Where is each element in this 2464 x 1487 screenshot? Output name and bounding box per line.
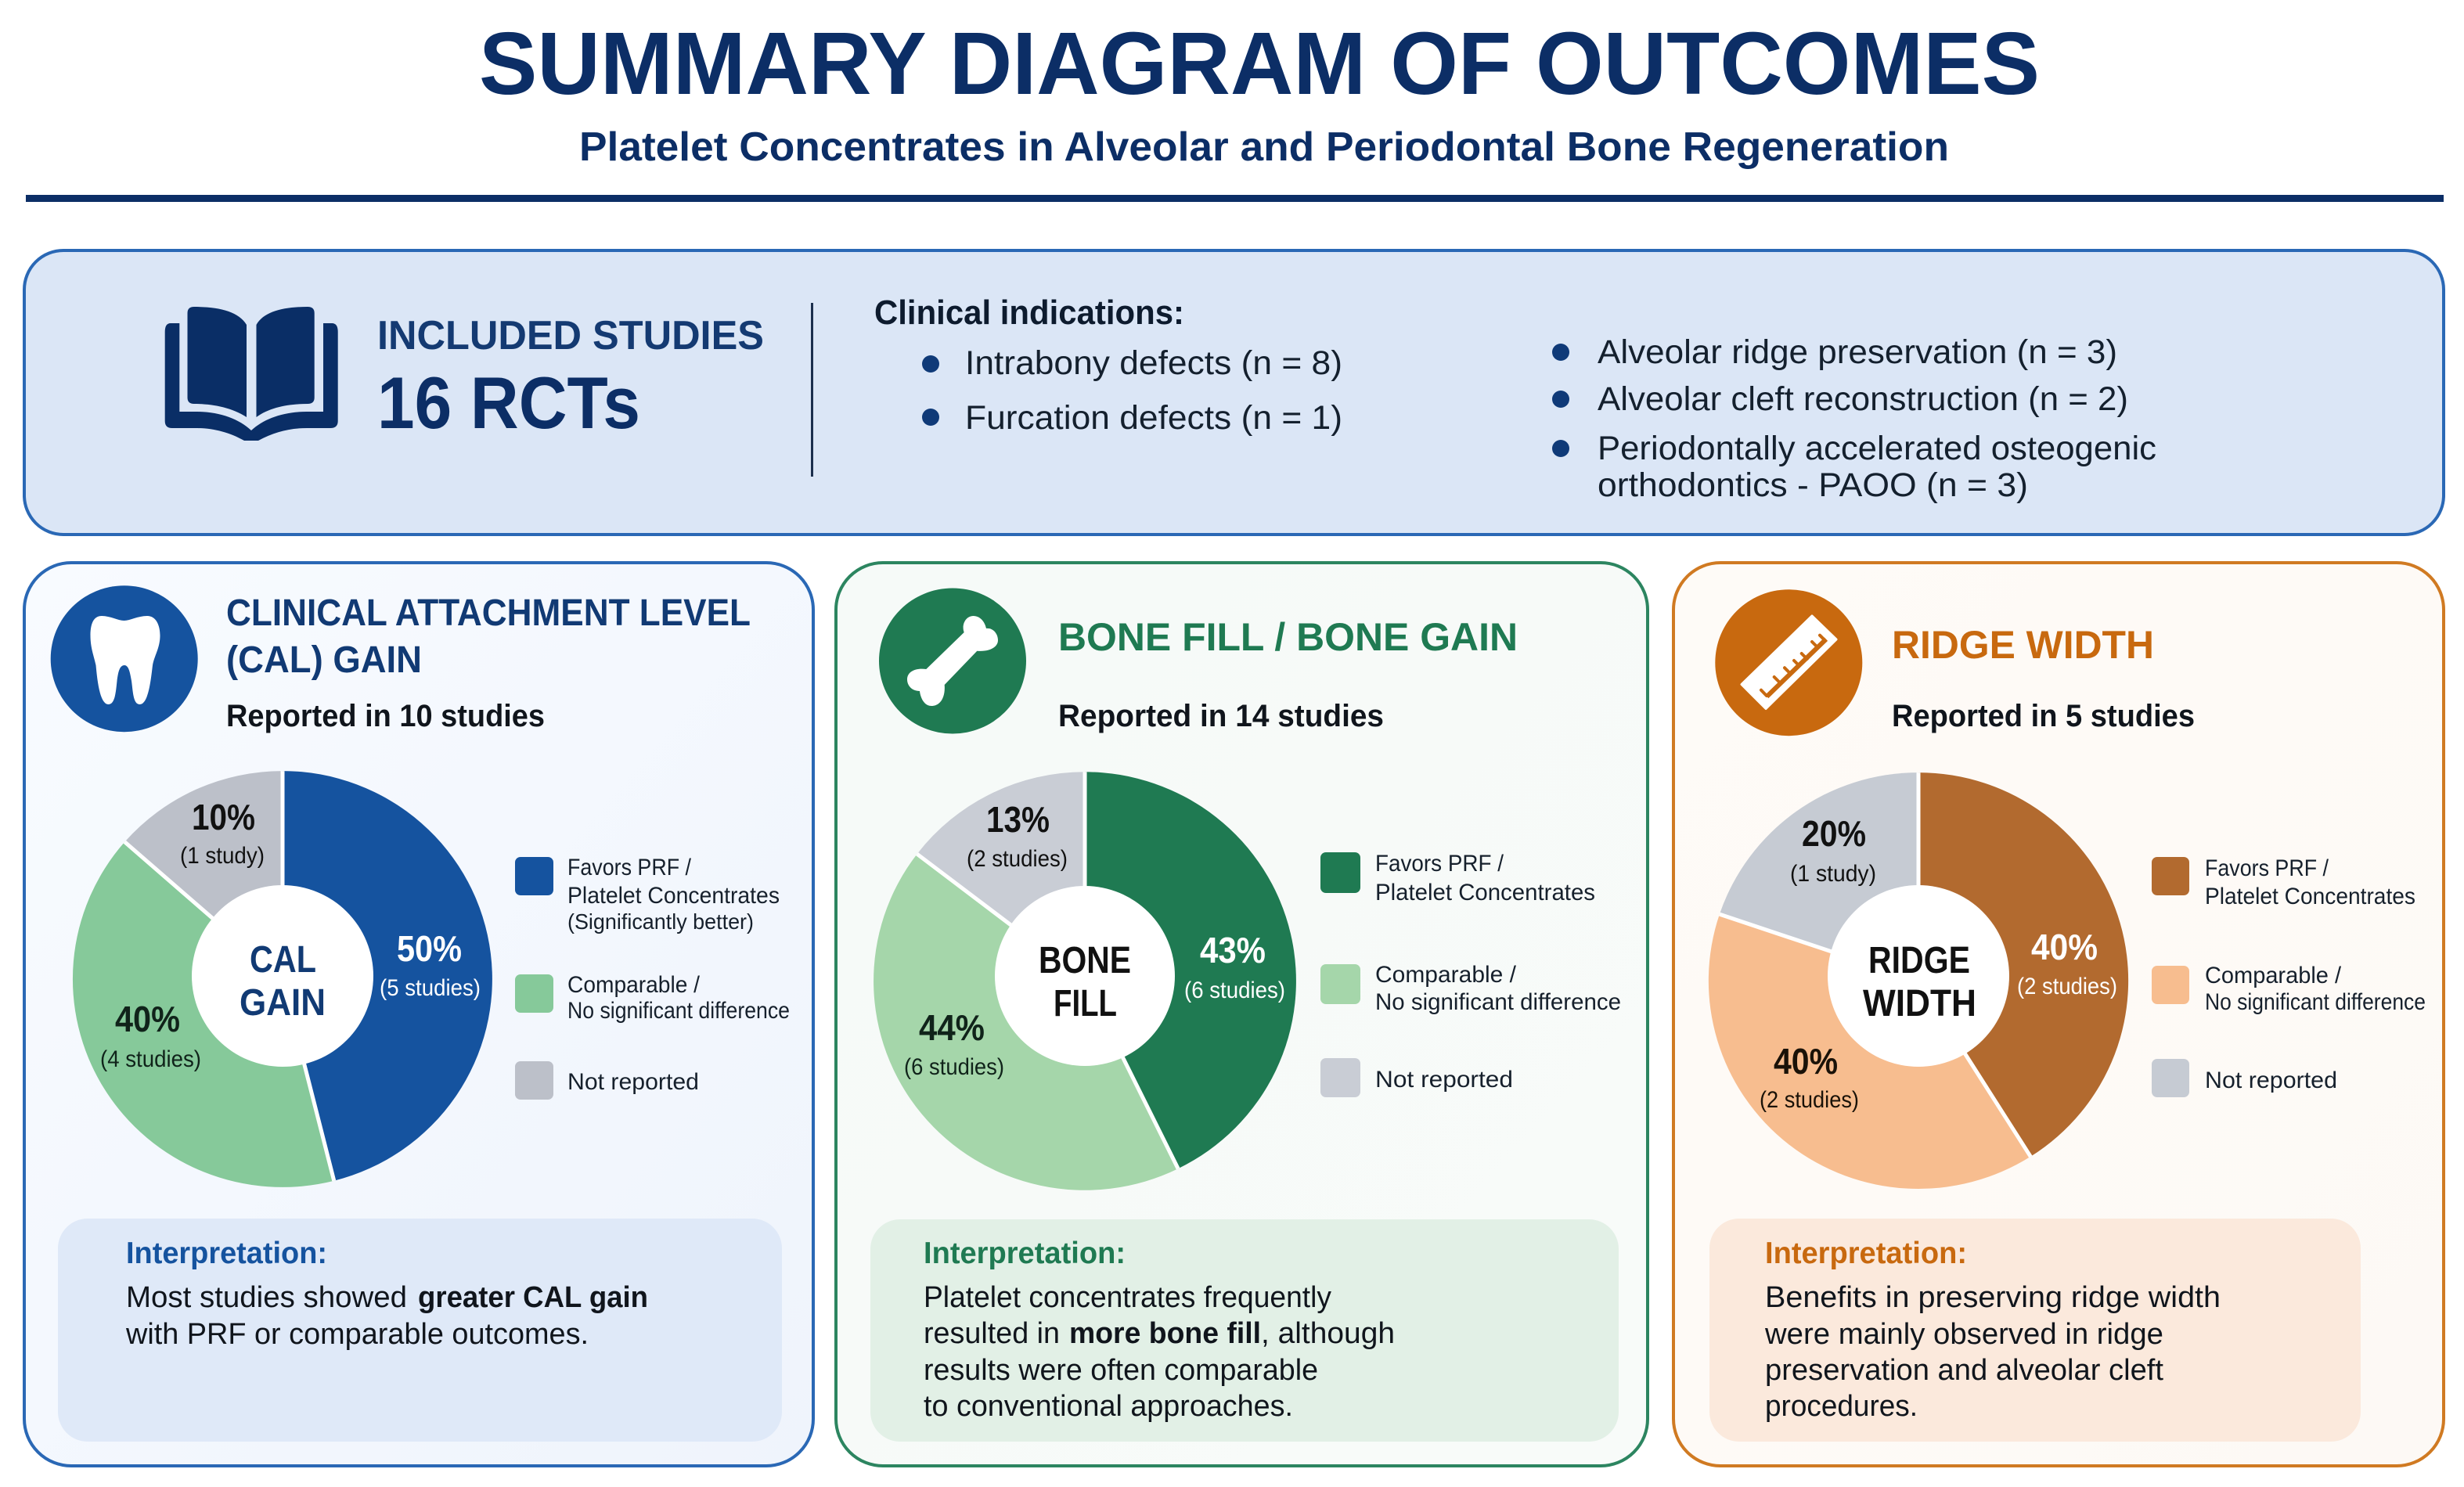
legend: ridge width: Platelet Concentrates: [2205, 884, 2415, 909]
callout: ridge width interpretation: [1709, 1219, 2361, 1442]
clinical indications list: Alveolar ridge preservation (n = 3): [1598, 333, 2117, 371]
callout: ridge width interpretation: preservation and alveolar cleft: [1765, 1354, 2163, 1387]
panel: CAL gain: [24, 563, 813, 1466]
donut chart: CAL gain: 40%: [115, 999, 180, 1039]
donut chart: CAL gain: 10%: [192, 797, 255, 837]
donut chart: CAL gain: GAIN: [240, 982, 326, 1024]
legend: bone fill: [1320, 851, 1621, 1097]
icon: tooth: [51, 585, 198, 732]
callout: bone fill interpretation: results were often comparable: [924, 1354, 1318, 1387]
legend: CAL gain: Favors PRF /: [567, 855, 692, 880]
callout: CAL interpretation: greater CAL gain: [418, 1281, 648, 1314]
legend: ridge width: No significant difference: [2205, 989, 2426, 1015]
donut chart: ridge width: [1709, 772, 2128, 1189]
legend: CAL gain: Not reported: [567, 1069, 699, 1095]
legend: CAL gain: (Significantly better): [567, 909, 754, 934]
heading: CAL gain: [226, 592, 751, 733]
legend: bone fill: Comparable /: [1375, 962, 1517, 988]
heading: CAL gain: (CAL) GAIN: [226, 639, 422, 681]
donut chart: bone fill: 43%: [1200, 930, 1266, 970]
donut chart: ridge width: RIDGE: [1868, 940, 1970, 981]
callout: bone fill interpretation: [870, 1219, 1619, 1442]
heading: bone fill: BONE FILL / BONE GAIN: [1058, 615, 1518, 659]
donut chart: bone fill: (6 studies): [1184, 978, 1285, 1003]
included studies count: 16 RCTs: [377, 362, 640, 444]
legend: bone fill: Not reported: [1375, 1067, 1513, 1093]
legend: bone fill: No significant difference: [1375, 989, 1621, 1015]
donut chart: bone fill: 44%: [919, 1007, 985, 1048]
legend: bone fill: Platelet Concentrates: [1375, 880, 1595, 906]
subtitle: Platelet Concentrates in Alveolar and Periodontal Bone Regeneration: [579, 124, 1949, 170]
callout: CAL interpretation: with PRF or comparable outcomes.: [125, 1318, 589, 1351]
legend: ridge width: Comparable /: [2205, 963, 2342, 988]
legend: CAL gain: Platelet Concentrates: [567, 883, 780, 909]
callout: bone fill interpretation: Interpretation:: [924, 1237, 1126, 1270]
donut chart: ridge width: (1 study): [1790, 861, 1876, 887]
donut chart: CAL gain: (5 studies): [380, 975, 481, 1001]
callout: CAL interpretation: Most studies showed: [126, 1281, 407, 1314]
heading: ridge width: RIDGE WIDTH: [1892, 623, 2154, 667]
donut chart: bone fill: (6 studies): [904, 1054, 1004, 1080]
panel: included studies: [24, 250, 2444, 535]
donut chart: bone fill: BONE: [1039, 940, 1131, 981]
title: SUMMARY DIAGRAM OF OUTCOMES: [479, 14, 2040, 113]
heading: ridge width: Reported in 5 studies: [1892, 699, 2195, 733]
legend: CAL gain: Comparable /: [567, 972, 701, 998]
clinical indications list: [874, 293, 2156, 504]
icon: ruler: [1715, 589, 1862, 736]
donut chart: CAL gain: 50%: [397, 928, 462, 969]
heading: CAL gain: CLINICAL ATTACHMENT LEVEL: [226, 592, 751, 634]
clinical indications list: Intrabony defects (n = 8): [965, 344, 1342, 382]
callout: CAL interpretation: Interpretation:: [126, 1237, 327, 1270]
donut chart: bone fill: 13%: [986, 799, 1050, 840]
icon: bone: [879, 589, 1026, 734]
header rule: [26, 195, 2444, 202]
icon: open book: [165, 307, 338, 441]
legend: bone fill: Favors PRF /: [1375, 851, 1504, 877]
panel: ridge width: [1673, 563, 2444, 1466]
panel: bone fill: [836, 563, 1648, 1466]
heading: ridge width: [1892, 623, 2195, 733]
included studies count: [377, 313, 764, 444]
donut chart: CAL gain: (4 studies): [100, 1046, 201, 1072]
legend: CAL gain: No significant difference: [567, 998, 790, 1024]
legend: ridge width: [2152, 855, 2426, 1097]
donut chart: ridge width: (2 studies): [2017, 974, 2117, 999]
callout: bone fill interpretation: to conventional approaches.: [924, 1390, 1293, 1423]
clinical indications list: orthodontics - PAOO (n = 3): [1598, 466, 2028, 504]
donut chart: bone fill: [874, 772, 1296, 1190]
callout: bone fill interpretation: more bone fill: [1069, 1317, 1261, 1350]
donut chart: ridge width: 40%: [1774, 1041, 1838, 1082]
legend: CAL gain: [515, 855, 790, 1100]
donut chart: bone fill: (2 studies): [967, 846, 1068, 872]
donut chart: ridge width: 20%: [1802, 813, 1866, 854]
heading: CAL gain: Reported in 10 studies: [226, 699, 545, 733]
heading: bone fill: [1058, 615, 1518, 733]
legend: ridge width: Not reported: [2205, 1068, 2337, 1093]
callout: bone fill interpretation: Platelet concentrates frequently: [924, 1281, 1331, 1314]
callout: ridge width interpretation: were mainly observed in ridge: [1764, 1318, 2163, 1351]
included studies count: INCLUDED STUDIES: [377, 313, 764, 358]
clinical indications list: Alveolar cleft reconstruction (n = 2): [1598, 380, 2128, 418]
callout: bone fill interpretation: , although: [1261, 1317, 1395, 1350]
donut chart: ridge width: 40%: [2031, 927, 2098, 967]
callout: ridge width interpretation: Benefits in preserving ridge width: [1765, 1281, 2221, 1314]
donut chart: CAL gain: (1 study): [180, 843, 265, 869]
callout: CAL interpretation: [58, 1219, 782, 1442]
clinical indications list: Furcation defects (n = 1): [965, 399, 1342, 437]
callout: bone fill interpretation: resulted in: [924, 1317, 1060, 1350]
donut chart: CAL gain: [73, 771, 492, 1187]
donut chart: CAL gain: CAL: [250, 939, 316, 981]
clinical indications list: Periodontally accelerated osteogenic: [1598, 430, 2156, 467]
heading: bone fill: Reported in 14 studies: [1058, 699, 1384, 733]
callout: ridge width interpretation: procedures.: [1765, 1390, 1918, 1423]
callout: ridge width interpretation: Interpretation:: [1765, 1237, 1967, 1270]
donut chart: ridge width: WIDTH: [1863, 983, 1976, 1024]
header: [26, 14, 2444, 202]
clinical indications list: Clinical indications:: [874, 293, 1184, 332]
donut chart: bone fill: FILL: [1054, 983, 1117, 1024]
legend: ridge width: Favors PRF /: [2205, 855, 2329, 881]
donut chart: ridge width: (2 studies): [1760, 1087, 1859, 1113]
